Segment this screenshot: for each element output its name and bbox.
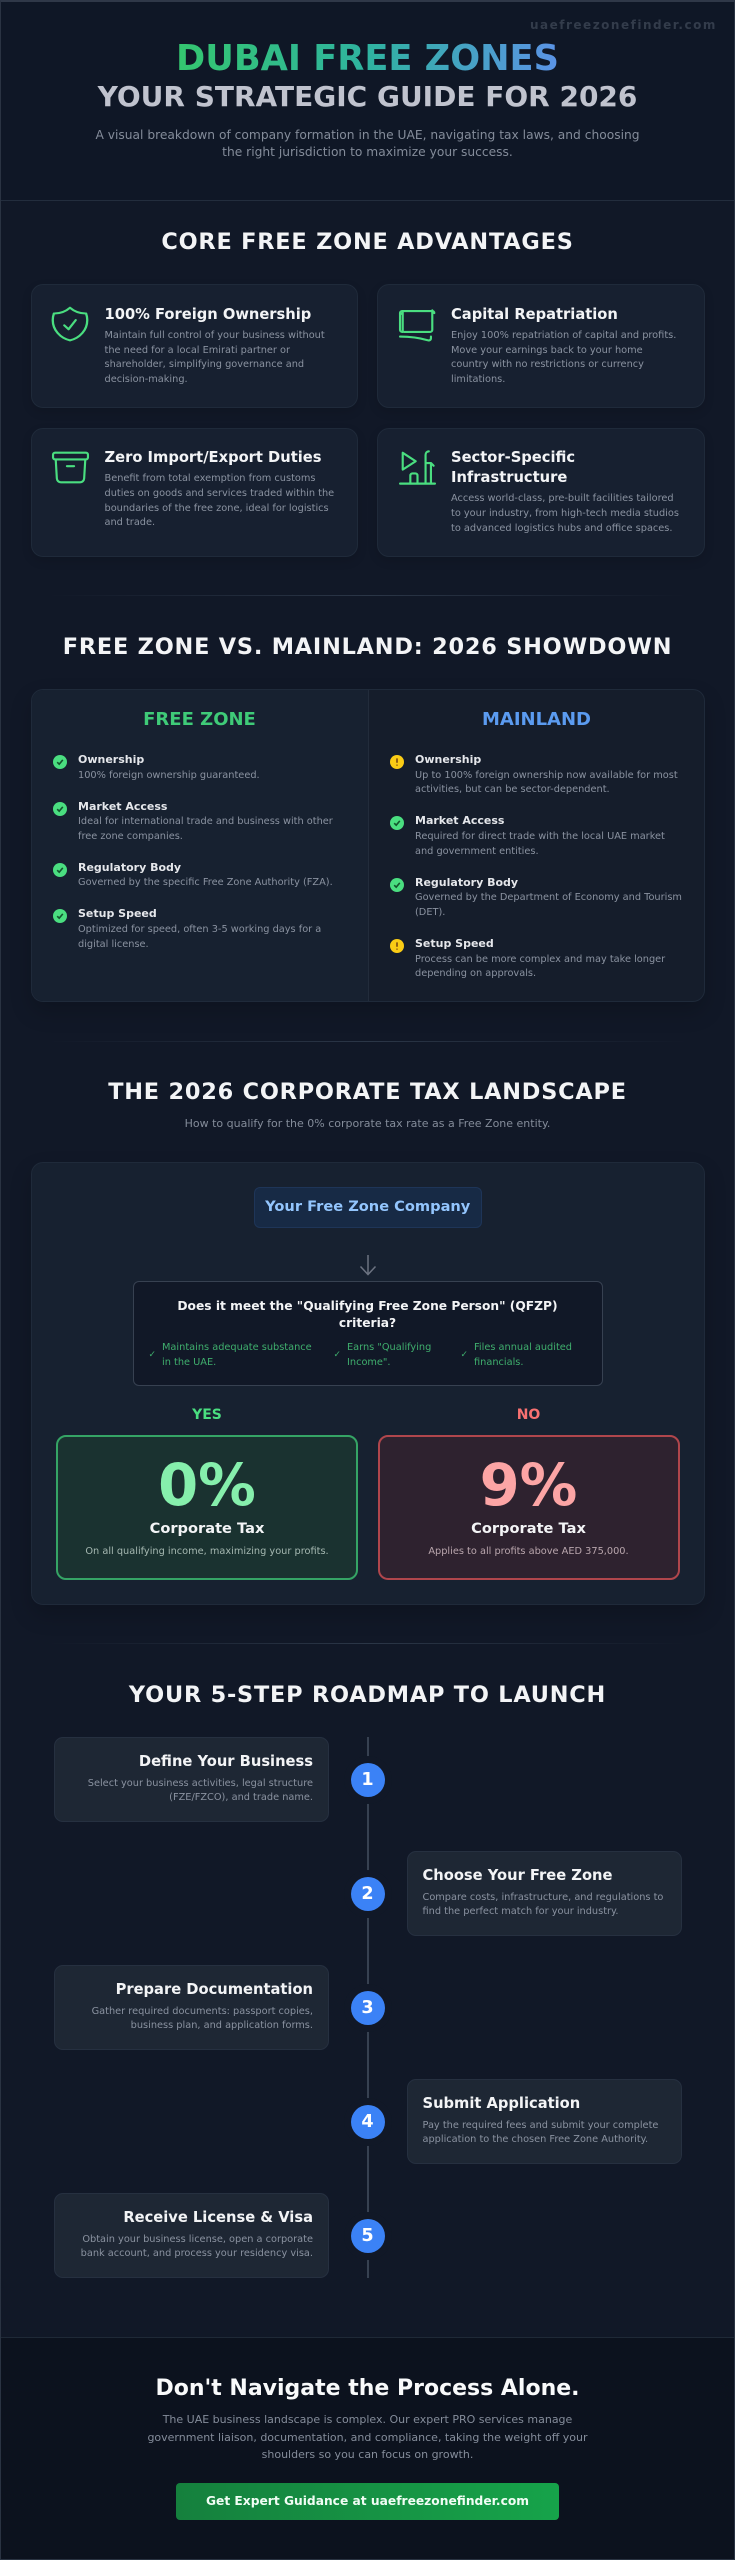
criterion 2: Earns "Qualifying [347, 1342, 431, 1353]
company box [254, 1187, 482, 1228]
card text: Move your earnings back to your home [451, 345, 643, 356]
call to action panel [0, 2337, 735, 2560]
column heading: FREE ZONE [143, 709, 256, 730]
card text: the need for a local Emirati partner or [104, 345, 290, 356]
item: market access: and government entities. [415, 846, 539, 857]
panel: comparison [30, 689, 704, 1002]
card: Prepare Documentation [116, 1981, 313, 1998]
card text: Access world-class, pre-built facilities tailored [451, 493, 674, 504]
question: criteria? [339, 1316, 396, 1330]
card: find the perfect match for your industry. [422, 1906, 619, 1917]
question: Does it meet the "Qualifying Free Zone Person" (QFZP) [177, 1298, 558, 1312]
item: regulatory body: Governed by the specific Free Zone Authority (FZA). [78, 877, 333, 888]
cta button: Get Expert Guidance at uaefreezonefinder.com [206, 2494, 529, 2508]
card text [104, 473, 334, 528]
title: DUBAI FREE ZONES [176, 38, 559, 79]
card title [451, 448, 575, 486]
item: regulatory body: (DET). [415, 907, 445, 918]
card: (FZE/FZCO), and trade name. [169, 1792, 313, 1803]
criterion 1: ✓ [148, 1350, 156, 1360]
card: Gather required documents: passport copies, [92, 2006, 313, 2017]
criterion 1: Maintains adequate substance [162, 1342, 312, 1353]
cta text: government liaison, documentation, and compliance, taking the weight off your [147, 2431, 588, 2444]
cta text: shoulders so you can focus on growth. [262, 2448, 473, 2461]
card [406, 1851, 682, 1936]
watermark: uaefreezonefinder.com [530, 18, 717, 32]
cta heading: Don't Navigate the Process Alone. [155, 2376, 580, 2401]
item: ownership: activities, but can be sector-dependent. [415, 784, 610, 795]
card: Pay the required fees and submit your complete [422, 2120, 658, 2131]
timeline [54, 1737, 682, 2278]
panel: 100% foreign ownership [30, 284, 358, 408]
card text: shareholder, simplifying governance and [104, 359, 304, 370]
card: Obtain your business license, open a corporate [82, 2234, 313, 2245]
item: ownership: Ownership [78, 753, 144, 766]
criterion 3: ✓ [460, 1350, 468, 1360]
column: mainland [390, 709, 682, 979]
item: setup speed: Process can be more complex and may take longer [415, 954, 665, 965]
criterion 2: ✓ [334, 1350, 341, 1360]
card text: and trade. [104, 517, 155, 528]
intro text [95, 128, 640, 158]
icon: check [390, 878, 404, 892]
icon: check [53, 909, 67, 923]
criterion 2 [334, 1342, 431, 1368]
label: Corporate Tax [471, 1520, 586, 1537]
icon: check [53, 802, 67, 816]
card text: limitations. [451, 374, 505, 385]
note: Applies to all profits above AED 375,000. [428, 1546, 629, 1556]
step 2 [351, 1851, 682, 1936]
icon: check [53, 755, 67, 769]
card: Receive License & Visa [123, 2209, 313, 2226]
card text: Enjoy 100% repatriation of capital and profits. [451, 330, 676, 341]
item: regulatory body: Regulatory Body [415, 876, 518, 889]
question box [132, 1281, 602, 1386]
criterion 1: in the UAE. [162, 1357, 216, 1368]
subtitle: YOUR STRATEGIC GUIDE FOR 2026 [98, 80, 637, 112]
card [54, 2193, 329, 2278]
item: ownership: 100% foreign ownership guaranteed. [78, 770, 260, 781]
card text [451, 330, 676, 385]
card [54, 1737, 329, 1822]
number [350, 1877, 384, 1911]
percent: 0% [158, 1452, 256, 1518]
panel: tax flow [30, 1162, 704, 1604]
card: Compare costs, infrastructure, and regulations to [422, 1892, 663, 1903]
heading: core advantages: CORE FREE ZONE ADVANTAGES [161, 229, 574, 255]
number: 2 [361, 1884, 374, 1904]
card text: country with no restrictions or currency [451, 359, 644, 370]
step 1 [54, 1737, 385, 1822]
icon: shield check [52, 306, 88, 342]
card text: to advanced logistics hubs and office spaces. [451, 523, 673, 534]
step 4 [351, 2079, 682, 2164]
card title: Zero Import/Export Duties [104, 448, 321, 466]
item: market access [53, 800, 333, 842]
question [177, 1298, 558, 1330]
icon: check [53, 863, 67, 877]
card title: Sector-Specific [451, 448, 575, 466]
item: ownership: Ownership [415, 753, 481, 766]
item: market access [390, 814, 665, 857]
number: 1 [361, 1770, 374, 1790]
heading: showdown: FREE ZONE VS. MAINLAND: 2026 SHOWDOWN [63, 634, 672, 660]
card: bank account, and process your residency visa. [81, 2248, 313, 2259]
item: setup speed [390, 937, 666, 979]
icon: warning [390, 939, 404, 953]
heading: roadmap: YOUR 5-STEP ROADMAP TO LAUNCH [129, 1682, 606, 1708]
company box: Your Free Zone Company [265, 1198, 470, 1215]
outcome: 0% [56, 1435, 358, 1580]
column: free zone [32, 690, 368, 1001]
card title: 100% Foreign Ownership [104, 306, 311, 322]
card: Choose Your Free Zone [422, 1867, 612, 1884]
cta text [147, 2413, 588, 2461]
percent: 9% [480, 1452, 577, 1518]
icon: check [390, 816, 404, 830]
item: setup speed: Setup Speed [78, 907, 157, 920]
item: market access: Market Access [78, 800, 167, 813]
card text: duties on goods and services traded within the [104, 488, 334, 499]
number [350, 2105, 384, 2139]
item: setup speed: digital license. [78, 939, 149, 950]
icon: warning [390, 755, 404, 769]
criterion 3 [460, 1342, 572, 1368]
item: setup speed: Setup Speed [415, 937, 494, 950]
note: On all qualifying income, maximizing your profits. [85, 1546, 329, 1556]
intro text: the right jurisdiction to maximize your success. [222, 144, 513, 158]
item: ownership: Up to 100% foreign ownership now available for most [415, 770, 678, 781]
header panel [0, 0, 735, 201]
icon: archive box [52, 452, 90, 484]
arrow [360, 1255, 376, 1276]
step 3 [54, 1965, 385, 2050]
card text: decision-making. [104, 374, 188, 385]
item: market access: free zone companies. [78, 831, 183, 842]
card [406, 2079, 682, 2164]
card text: boundaries of the free zone, ideal for logistics [104, 503, 329, 514]
criterion 1 [148, 1342, 312, 1368]
item: ownership [390, 753, 678, 795]
criterion 3: financials. [474, 1357, 524, 1368]
column heading: MAINLAND [482, 709, 591, 730]
item: ownership [53, 753, 260, 781]
number: 5 [361, 2226, 374, 2246]
panel: capital repatriation [377, 284, 704, 408]
number [350, 2219, 384, 2253]
item: regulatory body: Governed by the Department of Economy and Tourism [415, 892, 682, 903]
card text: Maintain full control of your business without [104, 330, 325, 341]
item: setup speed: Optimized for speed, often 3-5 working days for a [78, 924, 321, 935]
item: setup speed [53, 907, 321, 950]
number: 4 [361, 2112, 374, 2132]
card: business plan, and application forms. [131, 2020, 313, 2031]
outcome: 9% [378, 1435, 680, 1580]
step 5 [54, 2193, 385, 2278]
label: Corporate Tax [150, 1520, 264, 1537]
tax subheading: How to qualify for the 0% corporate tax rate as a Free Zone entity. [185, 1117, 550, 1130]
card text [451, 493, 679, 534]
criterion 2: Income". [347, 1357, 391, 1368]
heading: tax landscape: THE 2026 CORPORATE TAX LANDSCAPE [108, 1079, 627, 1105]
cta text: The UAE business landscape is complex. Our expert PRO services manage [163, 2413, 572, 2426]
card: Select your business activities, legal structure [88, 1778, 313, 1789]
item: regulatory body [53, 861, 333, 888]
item: regulatory body: Regulatory Body [78, 861, 181, 874]
card [54, 1965, 329, 2050]
item: market access: Market Access [415, 814, 504, 827]
card text [104, 330, 325, 385]
panel: zero duties [30, 428, 358, 557]
card text: Benefit from total exemption from customs [104, 473, 315, 484]
criterion 3: Files annual audited [474, 1342, 572, 1353]
label: no: NO [517, 1407, 540, 1423]
number [350, 1763, 384, 1797]
icon: banknotes [398, 309, 436, 342]
icon: facilities [399, 450, 436, 485]
item: market access: Ideal for international trade and business with other [78, 816, 333, 827]
panel: sector-specific infrastructure [377, 428, 704, 557]
card: Submit Application [422, 2095, 580, 2112]
item: regulatory body [390, 876, 682, 918]
number: 3 [361, 1998, 374, 2018]
card: application to the chosen Free Zone Authority. [422, 2134, 648, 2145]
card: Define Your Business [139, 1753, 313, 1770]
card title: Infrastructure [451, 468, 567, 486]
card title: Capital Repatriation [451, 306, 618, 322]
card text: to your industry, from high-tech media studios [451, 508, 679, 519]
number [350, 1991, 384, 2025]
item: market access: Required for direct trade with the local UAE market [415, 831, 665, 842]
cta button [176, 2482, 559, 2520]
item: setup speed: depending on approvals. [415, 968, 536, 979]
label: yes: YES [192, 1407, 222, 1423]
intro text: A visual breakdown of company formation in the UAE, navigating tax laws, and choosing [95, 128, 640, 142]
